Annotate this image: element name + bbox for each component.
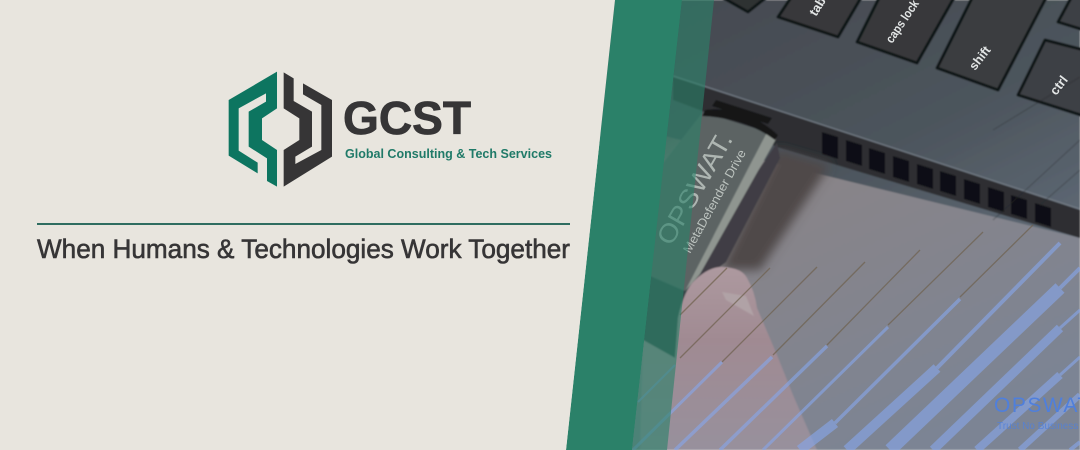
key legend: shift: shift <box>966 43 994 73</box>
drive body <box>648 112 767 291</box>
laptop deck <box>600 0 1080 240</box>
key legends <box>806 0 1071 98</box>
scratches on deck <box>993 77 1080 220</box>
logo tagline: Global Consulting & Tech Services <box>345 147 552 161</box>
key: caps lock <box>857 0 955 63</box>
logo wordmark: GCST <box>343 92 471 144</box>
drive labels <box>650 127 749 255</box>
drive shadow side <box>690 143 780 282</box>
logo mark: dark half <box>284 72 332 187</box>
photo: USB drive in laptop <box>600 0 1080 450</box>
edge highlight <box>673 76 1080 209</box>
key: top left <box>720 0 768 12</box>
key: ctrl <box>1018 40 1080 116</box>
drive brand: OPSWAT. <box>650 127 739 250</box>
logo <box>229 72 552 187</box>
watermark <box>994 394 1080 432</box>
key: shift <box>937 0 1047 90</box>
blue bars <box>633 243 1080 450</box>
drive collar <box>702 109 778 140</box>
shadow under drive <box>720 150 830 270</box>
usb port <box>712 100 772 124</box>
drive model: MetaDefender Drive <box>680 147 749 255</box>
laptop side edge <box>673 76 1080 238</box>
left panel <box>0 0 615 450</box>
drive silver strip <box>685 132 776 291</box>
finger nail <box>722 292 754 316</box>
thin lines <box>680 225 1033 362</box>
vents <box>822 132 1051 227</box>
key: top right <box>1058 0 1080 30</box>
divider <box>37 223 570 225</box>
translucent green band <box>632 0 714 450</box>
finger <box>640 267 817 450</box>
diagonal line chart overlay <box>633 225 1080 450</box>
watermark tagline: Trust No Business <box>997 421 1078 432</box>
desk surface <box>600 130 1080 450</box>
key legend: ctrl: ctrl <box>1047 73 1071 98</box>
headline: When Humans & Technologies Work Together <box>37 234 570 264</box>
solid green band <box>566 0 682 450</box>
logo mark <box>229 72 332 187</box>
lower drive body <box>620 235 705 358</box>
key: tab <box>778 0 862 37</box>
logo mark: green half <box>229 72 277 187</box>
